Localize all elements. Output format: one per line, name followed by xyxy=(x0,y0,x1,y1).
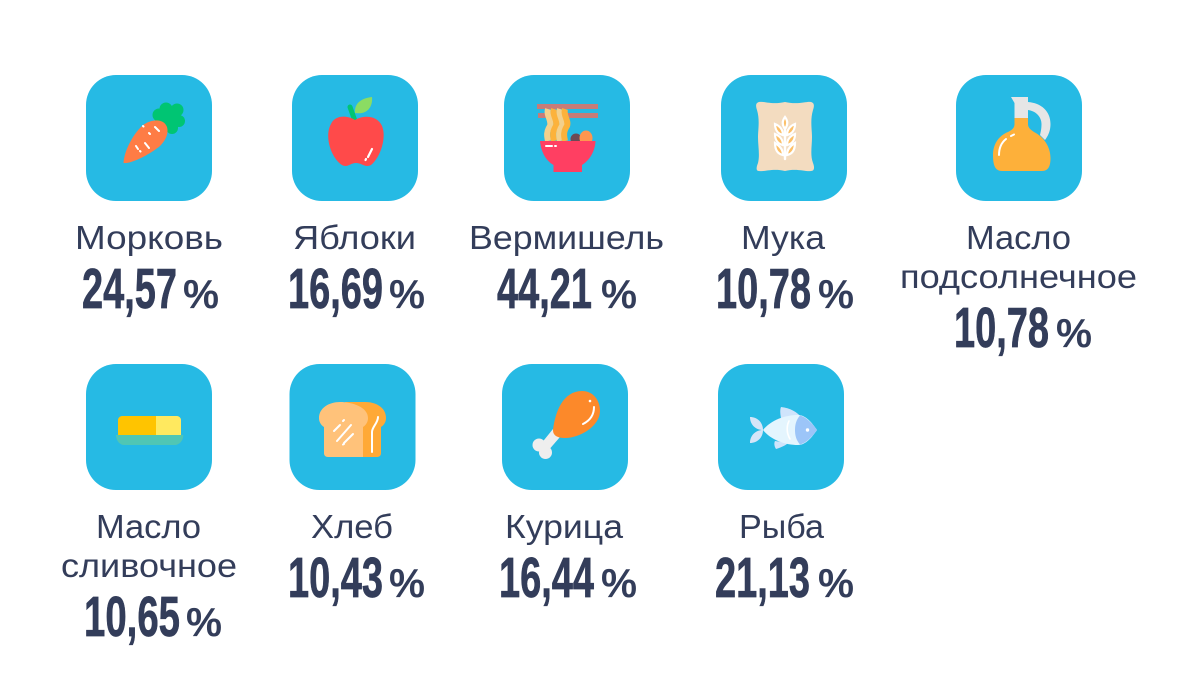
value: 16,69 %: % xyxy=(389,271,425,317)
value: 10,43 %: % xyxy=(389,560,425,606)
value: 10,43 %: 10,43 xyxy=(288,546,383,610)
value: 16,69 %: 16,69 xyxy=(288,257,383,321)
label: Масло сливочное xyxy=(61,508,237,584)
value: 16,44 %: % xyxy=(601,560,637,606)
panel: fish xyxy=(715,364,854,610)
panel: sunflower oil xyxy=(900,75,1137,360)
value: 21,13 %: % xyxy=(818,560,854,606)
icon: flour sack with wheat xyxy=(721,75,847,201)
label: Масло сливочное: Масло xyxy=(96,508,201,545)
value: 21,13 %: 21,13 xyxy=(715,546,810,610)
value: 24,57 %: 24,57 xyxy=(82,257,177,321)
icon: chicken leg xyxy=(502,364,628,490)
icon: butter xyxy=(86,364,212,490)
value: 10,78 %: % xyxy=(1056,310,1092,356)
label: Мука: Мука xyxy=(741,219,826,256)
icon: apple xyxy=(292,75,418,201)
icon: fish xyxy=(718,364,844,490)
label: Масло подсолнечное xyxy=(900,219,1137,295)
panel: apples xyxy=(288,75,425,321)
label: Масло сливочное: сливочное xyxy=(61,547,237,584)
label: Курица: Курица xyxy=(505,508,624,545)
value: 44,21 %: % xyxy=(601,271,637,317)
value: 16,44 %: 16,44 xyxy=(499,546,594,610)
value: 24,57 %: % xyxy=(183,271,219,317)
panel: carrot xyxy=(75,75,223,321)
label: Хлеб: Хлеб xyxy=(311,508,393,545)
panel: flour xyxy=(716,75,854,321)
icon: noodle bowl xyxy=(504,75,630,201)
label: Морковь: Морковь xyxy=(75,219,223,256)
label: Рыба: Рыба xyxy=(739,508,825,545)
icon: bread xyxy=(290,364,416,490)
label: Вермишель: Вермишель xyxy=(469,219,664,256)
panel: chicken xyxy=(499,364,637,610)
icon: carrot xyxy=(86,75,212,201)
value: 10,65 %: % xyxy=(186,599,222,645)
label: Масло подсолнечное: Масло xyxy=(966,219,1071,256)
label: Яблоки: Яблоки xyxy=(293,219,416,256)
panel: vermicelli xyxy=(469,75,664,321)
value: 10,65 %: 10,65 xyxy=(84,585,180,649)
panel: bread xyxy=(288,364,425,610)
value: 10,78 %: 10,78 xyxy=(954,296,1049,360)
panel: butter xyxy=(61,364,237,649)
icon: oil jug xyxy=(956,75,1082,201)
value: 44,21 %: 44,21 xyxy=(497,257,592,321)
label: Масло подсолнечное: подсолнечное xyxy=(900,258,1137,295)
value: 10,78 %: 10,78 xyxy=(716,257,811,321)
value: 10,78 %: % xyxy=(818,271,854,317)
